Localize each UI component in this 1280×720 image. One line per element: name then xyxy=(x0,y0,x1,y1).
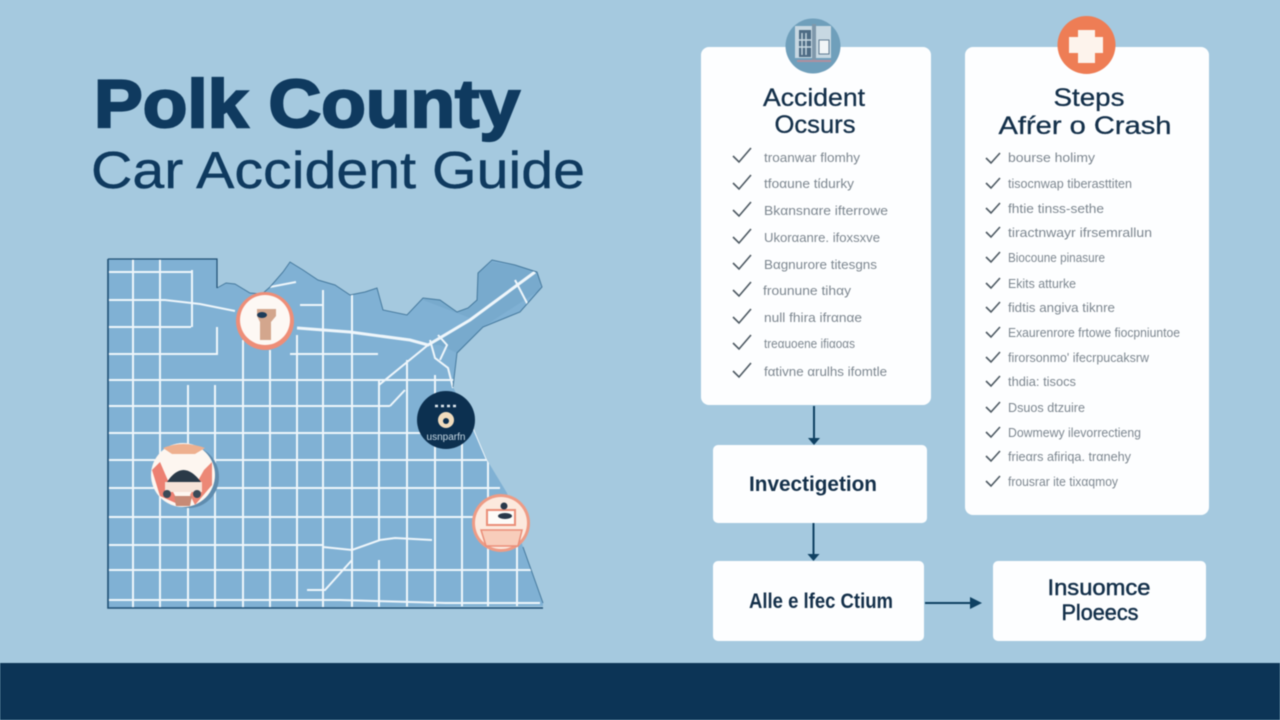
checklist: Ekits atturke xyxy=(1008,276,1076,291)
panel heading: Steps xyxy=(1054,84,1124,112)
arrow: investigation to claim xyxy=(808,523,820,561)
checklist: fαtivne αrulhs ifomtle xyxy=(764,364,887,379)
checklist: fhtie tinss-sethe xyxy=(1008,201,1104,216)
map marker: dark: usnparfn xyxy=(427,432,465,443)
panel heading: Accident xyxy=(763,84,865,112)
checklist: thdia: tisocs xyxy=(1008,374,1076,389)
icon: medical cross xyxy=(1058,16,1116,74)
title xyxy=(91,66,585,200)
checklist: Bkαnsnαre ifterrowe xyxy=(764,203,888,218)
checklist: bourse holimy xyxy=(1008,150,1096,165)
box: investigation xyxy=(713,445,927,523)
checklist: tisocnwap tiberasttiten xyxy=(1008,176,1132,191)
panel heading xyxy=(998,84,1172,140)
checklist: Dsuos dtzuire xyxy=(1008,400,1085,415)
subtitle: Car Accident Guide xyxy=(91,142,585,200)
checklist: treαuoene ifiαoαs xyxy=(764,336,855,351)
box: claim: Alle e lfec Ctium xyxy=(749,590,893,613)
checklist: Biocoune pinasure xyxy=(1008,250,1105,265)
checklist: troanwar flomhy xyxy=(764,150,861,165)
checklist: Exaurenrore frtowe fiocpniuntoe xyxy=(1008,325,1180,340)
arrow: accident to investigation xyxy=(808,406,820,445)
panel heading: Afŕer o Crash xyxy=(998,112,1172,140)
map marker: dark xyxy=(417,391,475,449)
checklist: frieαrs afiriqa. trαnehy xyxy=(1008,449,1131,464)
checklist: Dowmewy ilevorrectieng xyxy=(1008,425,1141,440)
box: claim xyxy=(713,561,924,641)
checklist: fidtis angiva tiknre xyxy=(1008,300,1115,315)
icon: building xyxy=(786,18,840,74)
checklist xyxy=(733,148,888,379)
footer band xyxy=(0,663,1280,720)
checklist xyxy=(986,150,1180,489)
county map xyxy=(108,259,543,608)
panel: steps after a crash xyxy=(965,16,1209,515)
checklist: Ukorαanre. ifoxsxve xyxy=(764,230,880,245)
panel: accident occurs xyxy=(701,18,931,405)
box: insurance process: Insuomce xyxy=(1048,575,1150,600)
map marker: top xyxy=(236,292,294,350)
map marker: left xyxy=(151,443,219,508)
checklist: tiractnwayr ifrsemrallun xyxy=(1008,225,1152,240)
checklist: firorsonmo' ifecrpucaksrw xyxy=(1008,350,1150,365)
panel heading xyxy=(763,84,865,139)
title: Polk County xyxy=(94,66,520,142)
box: investigation: Invectigetion xyxy=(749,473,877,496)
checklist: frousrar ite tixαqmoy xyxy=(1008,474,1118,489)
arrow: claim to insurance xyxy=(925,597,982,609)
panel heading: Ocsurs xyxy=(774,111,856,139)
checklist: frounune tihαy xyxy=(763,283,852,298)
checklist: tfoαune tίdurky xyxy=(764,176,855,191)
checklist: null fhira ifrαnαe xyxy=(764,310,862,325)
box: insurance process xyxy=(993,561,1206,641)
box: insurance process: Ploeecs xyxy=(1062,600,1138,625)
map marker: bottom right xyxy=(472,494,530,552)
checklist: Bαgnurore titesgns xyxy=(764,257,878,272)
